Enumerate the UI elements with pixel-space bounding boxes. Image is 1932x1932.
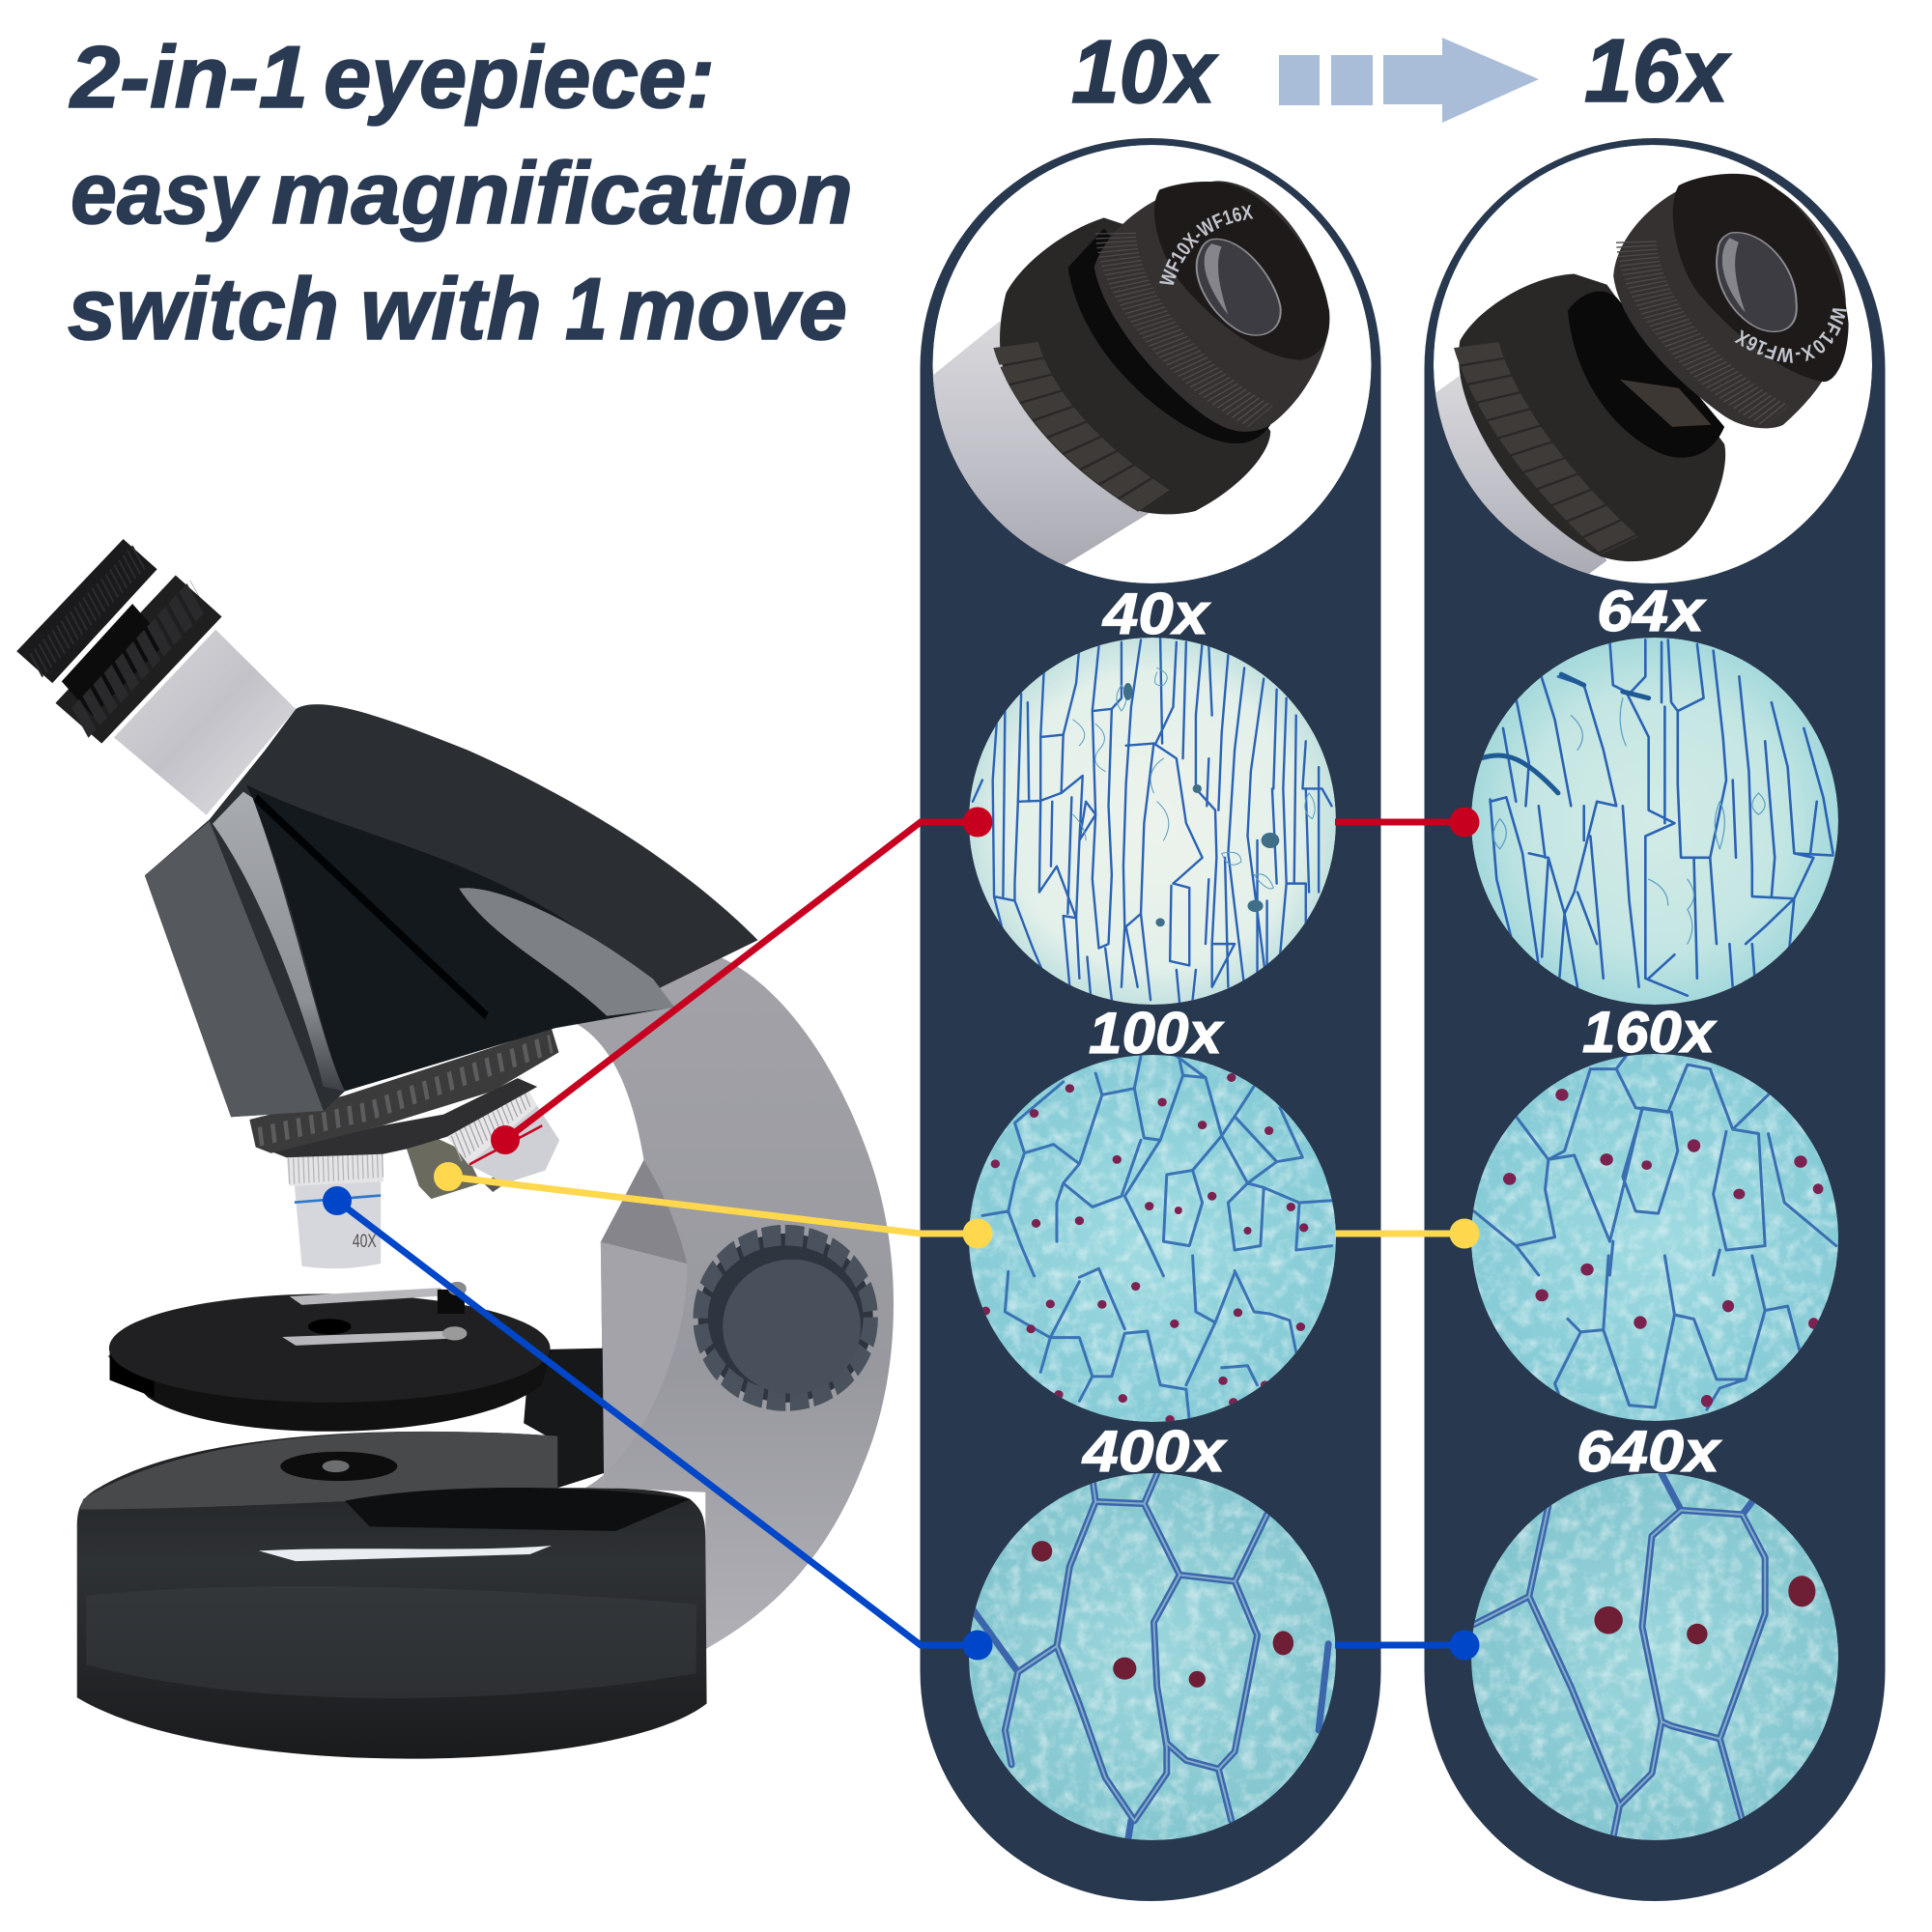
title: eyepiece:	[324, 29, 715, 127]
micrograph 160x	[1468, 1053, 1841, 1424]
micrograph 40x	[969, 638, 1336, 1005]
connector: red 40x and 64x	[491, 808, 1480, 1154]
title: switch	[68, 261, 339, 358]
eyepiece 16x photo	[1434, 145, 1872, 583]
magnification 40x: 40x	[1102, 582, 1211, 646]
title: easy	[71, 145, 260, 242]
connector: blue 400x and 640x	[323, 1186, 1480, 1660]
panel: 16x column	[1424, 138, 1886, 1901]
objective 40x	[287, 1149, 384, 1268]
eyepiece engraving: WF10X-WF16X	[1159, 205, 1254, 285]
connector: yellow 100x and 160x	[434, 1162, 1480, 1248]
arrow: 10x to 16x	[1279, 38, 1539, 123]
microscope arm	[573, 957, 894, 1649]
title	[68, 29, 853, 358]
magnification 160x: 160x	[1582, 1000, 1718, 1065]
magnification 64x: 64x	[1597, 579, 1707, 643]
title: magnification	[271, 145, 853, 242]
eyepiece engraving: WF10X-WF16X	[1734, 308, 1847, 363]
micrograph 400x	[966, 1472, 1339, 1843]
objective 40x: 40X	[353, 1231, 377, 1252]
microscope photo	[16, 539, 894, 1759]
body head	[145, 704, 757, 1117]
panel: 10x column	[920, 138, 1381, 1901]
eyepiece 10x photo	[933, 145, 1372, 583]
title: with	[360, 261, 542, 358]
eyepiece tube	[114, 630, 296, 815]
title: 1	[565, 261, 608, 358]
objective 10x	[407, 1134, 480, 1199]
micrograph 64x	[1471, 638, 1838, 1005]
stage	[108, 1282, 552, 1432]
label: 16x eyepiece: 16x	[1584, 20, 1731, 121]
title: 2-in-1	[69, 29, 308, 127]
magnification 640x: 640x	[1577, 1419, 1722, 1484]
label: 10x eyepiece: 10x	[1071, 21, 1218, 122]
nosepiece	[249, 1028, 558, 1157]
micrograph 640x	[1468, 1472, 1841, 1843]
stage support	[524, 1349, 604, 1488]
magnification 100x: 100x	[1089, 1001, 1225, 1065]
objective 4x	[444, 1076, 559, 1192]
focus knob	[698, 1234, 873, 1403]
micrograph 100x	[966, 1053, 1339, 1424]
base	[77, 1432, 707, 1759]
eyepiece rings	[16, 539, 222, 744]
magnification 400x: 400x	[1082, 1419, 1228, 1484]
title: move	[619, 261, 847, 358]
